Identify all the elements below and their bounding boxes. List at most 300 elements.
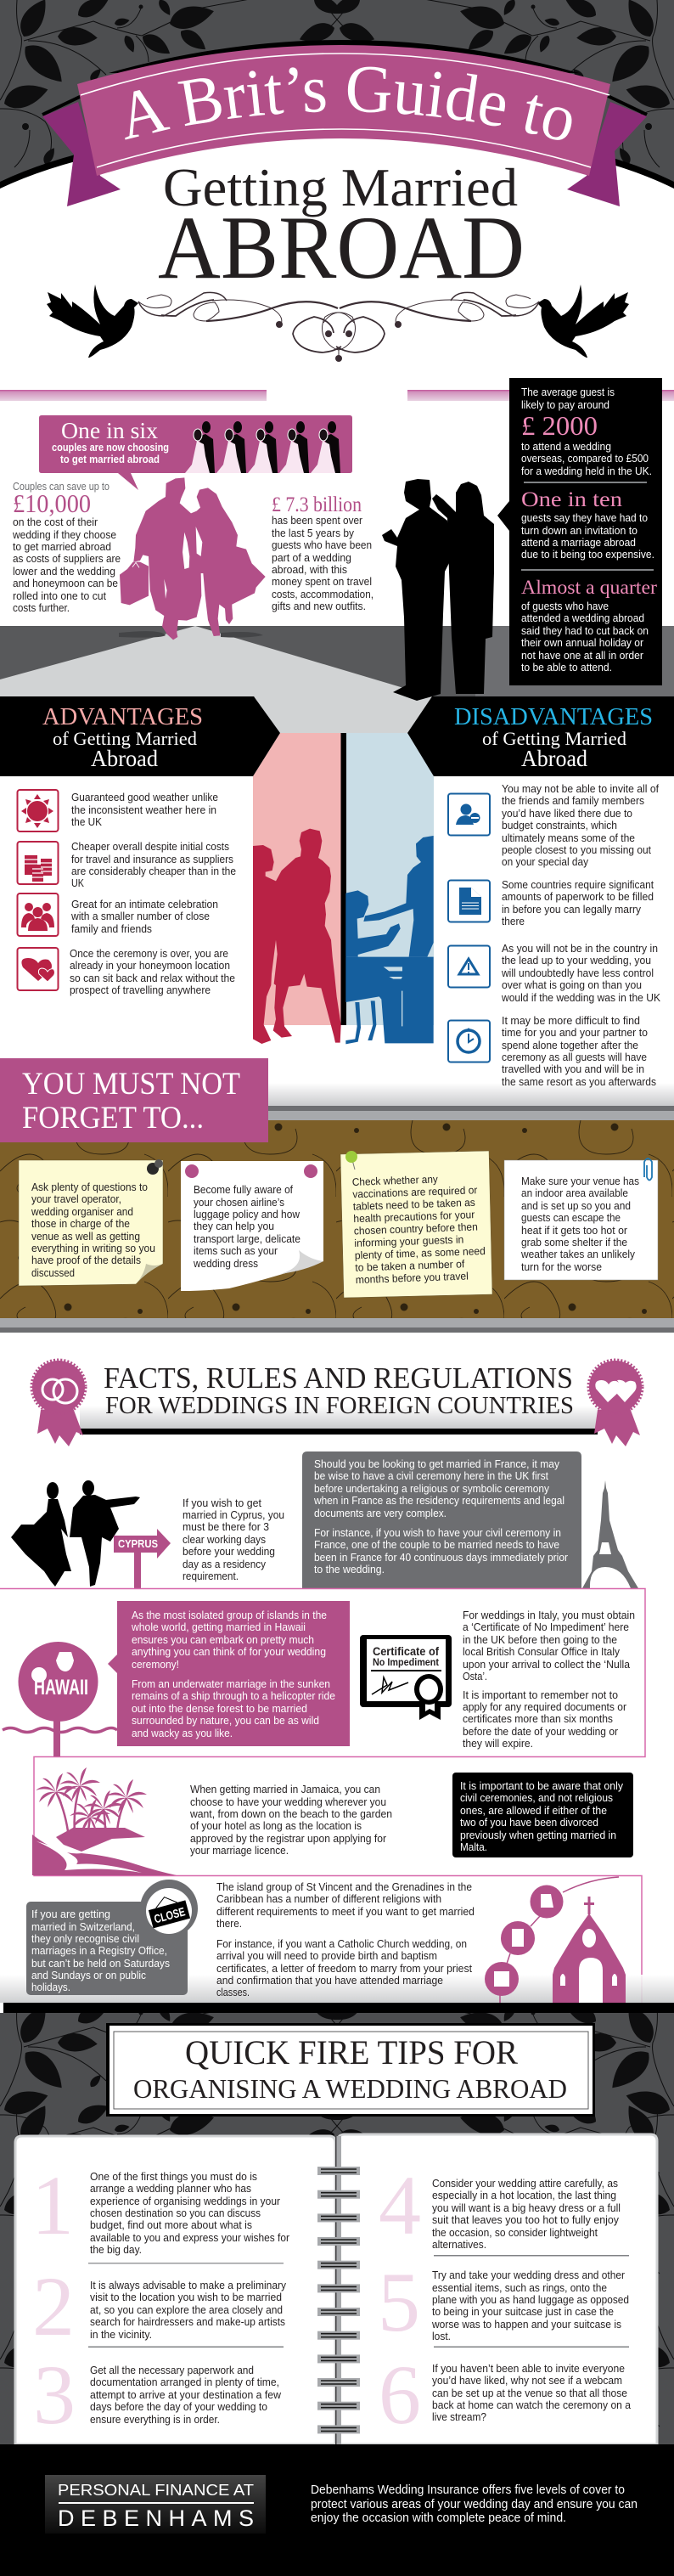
heading box: quick fire tips: QUICK FIRE TIPS FOR	[185, 2033, 518, 2072]
connector lines	[0, 1588, 645, 2003]
text: almost a quarter	[521, 577, 657, 674]
black arc under header	[0, 121, 674, 204]
white dome below header	[0, 127, 674, 399]
panel: Switzerland: marriages in a Registry Office,	[31, 1945, 167, 1957]
panel: Switzerland: If you are getting	[31, 1908, 110, 1920]
text: St Vincent: The island group of St Vincent and the Grenadines in the	[216, 1881, 472, 1893]
arrow sign: Cyprus	[114, 1529, 171, 1588]
sticky note 2: transport large, delicate	[194, 1233, 300, 1245]
icon: green pin	[345, 1151, 357, 1170]
tip 2: visit to the location you wish to be married	[90, 2291, 282, 2303]
one in six caption: to get married abroad	[60, 454, 160, 465]
tip 1: budget, find out more about what is	[90, 2219, 252, 2231]
icon: dove left	[47, 285, 138, 358]
text: Italy	[463, 1609, 635, 1750]
tip 2: at, so you can explore the area closely and	[90, 2304, 283, 2316]
text: Cyprus: requirement.	[183, 1570, 239, 1582]
heading panel: advantages: Abroad	[91, 746, 158, 771]
text: Debenhams insurance: protect various areas of your wedding day and ensure you can	[311, 2497, 637, 2511]
text: Cyprus: day as a residency	[183, 1559, 267, 1570]
text: St Vincent: there.	[216, 1918, 242, 1930]
text: average guest: The average guest is	[521, 386, 615, 398]
text: Italy: they will expire.	[463, 1738, 533, 1750]
sticky note 2: Become fully aware of	[194, 1184, 293, 1196]
text: average guest: to attend a wedding	[521, 441, 611, 453]
text: advantages list: are considerably cheaper than in the	[71, 865, 236, 877]
text: average guest	[521, 386, 652, 477]
panel: Switzerland: and Sundays or on public	[31, 1970, 146, 1981]
panel: Switzerland: they only recognise civil	[31, 1933, 139, 1945]
text: almost a quarter: of guests who have	[521, 600, 609, 612]
sticky note 1: wedding organiser and	[31, 1206, 133, 1218]
text: Debenhams insurance: Debenhams Wedding Insurance offers five levels of cover to	[311, 2483, 625, 2497]
text: advantages list: Cheaper overall despite initial costs	[71, 841, 229, 853]
text: disadvantages list: You may not be able to invite all of	[502, 783, 660, 795]
heading panel: disadvantages	[407, 696, 674, 776]
tip 5: lost.	[432, 2331, 451, 2342]
tip 4	[432, 2178, 621, 2251]
sticky note 4: and is set up so you and	[521, 1200, 631, 1212]
sticky note 3	[340, 1151, 492, 1298]
flourish ornament	[138, 292, 539, 362]
sticky note 1: your travel operator,	[31, 1193, 121, 1205]
text: disadvantages list: would if the wedding was in the UK	[501, 992, 661, 1004]
heading panel: disadvantages: of Getting Married	[482, 728, 626, 749]
text: almost a quarter: Almost a quarter	[521, 577, 657, 598]
text: Italy: in the UK before then going to the	[463, 1634, 617, 1646]
sticky note 1: venue as well as getting	[31, 1231, 140, 1243]
tip 5: to being in your suitcase just in case the	[432, 2306, 614, 2318]
text: one in ten	[521, 488, 654, 561]
panel: Switzerland: holidays.	[31, 1981, 70, 1993]
text: Cyprus: must be there for 3	[183, 1521, 269, 1533]
heading: facts rules and regulations: FACTS, RULES AND REGULATIONS	[104, 1361, 573, 1395]
text: disadvantages list	[501, 783, 661, 1088]
panel: France: to the wedding.	[314, 1564, 385, 1575]
icon: dove right	[537, 285, 629, 358]
text: 7.3 billion: £ 7.3 billion	[272, 493, 362, 516]
sticky note 3: vaccinations are required or	[352, 1184, 478, 1200]
text: St Vincent: certificates, a letter of freedom to marry from your priest	[216, 1963, 473, 1975]
heading box: quick fire tips: ORGANISING A WEDDING ABROAD	[133, 2073, 567, 2104]
text: Debenhams insurance: enjoy the occasion with complete peace of mind.	[311, 2511, 566, 2525]
tip 1: One of the first things you must do is	[90, 2171, 257, 2183]
heading panel: you must not forget to	[0, 1058, 268, 1142]
text: 7.3 billion: costs, accommodation,	[272, 589, 374, 600]
tip 6: you’d have liked, why not see if a webcam	[432, 2375, 622, 2387]
text: St Vincent: different requirements to meet if you want to get married	[216, 1906, 475, 1918]
panel: Malta: ones, are allowed if either of the	[460, 1805, 607, 1817]
icon: close sign: CLOSE	[153, 1904, 187, 1925]
text: advantages list: so can sit back and relax without the	[70, 972, 235, 984]
text: disadvantages list: the friends and family members	[502, 795, 644, 807]
text: couples can save: to get married abroad	[13, 541, 111, 553]
panel: noticeboard	[0, 1106, 674, 1333]
sticky note 2: items such as your	[194, 1245, 278, 1257]
text: Italy: local British Consular Office in Italy	[463, 1646, 621, 1658]
text: Italy: For weddings in Italy, you must obtain	[463, 1609, 635, 1621]
notebook spine and spiral rings	[317, 2136, 360, 2444]
text: Italy: Osta’.	[463, 1671, 487, 1683]
tip 4: the occasion, so consider lightweight	[432, 2227, 598, 2239]
sticky note 2: luggage policy and how	[194, 1209, 300, 1220]
panel: Hawaii: ceremony!	[132, 1659, 179, 1671]
text: disadvantages list: you’d have liked there due to	[502, 808, 632, 820]
tip 2: in the vicinity.	[90, 2329, 152, 2341]
text: Cyprus: If you wish to get	[183, 1497, 262, 1509]
panel: Hawaii: From an underwater marriage in the sunken	[132, 1678, 330, 1690]
text: advantages list	[70, 792, 236, 996]
sticky note 4: heat if it gets too hot or	[521, 1225, 627, 1237]
tip 4: suit that leaves you too hot to fully enjoy	[432, 2214, 620, 2226]
panel: Malta: civil ceremonies, and not religious	[460, 1792, 613, 1804]
silhouette: red couple	[253, 829, 341, 1044]
panel: Hawaii: anything you can think of for your wedding	[132, 1646, 326, 1658]
text: almost a quarter: to be able to attend.	[521, 662, 612, 674]
heading panel: you must not forget to: FORGET TO...	[22, 1101, 204, 1136]
tip 3: documentation arranged in plenty of time,	[90, 2376, 279, 2388]
sticky note 3: informing your guests in	[354, 1233, 464, 1249]
tip 3: ensure everything is in order.	[90, 2414, 220, 2426]
panel: quick fire section background	[0, 1998, 674, 2446]
ribbon banner	[42, 40, 648, 206]
sticky note 4: an indoor area available	[521, 1187, 628, 1199]
text: advantages list: Great for an intimate celebration	[71, 899, 218, 910]
heading panel: disadvantages: DISADVANTAGES	[454, 703, 653, 730]
tip 4: alternatives.	[432, 2239, 486, 2251]
text: Cyprus: before your wedding	[183, 1546, 275, 1558]
text: disadvantages list: It may be more difficult to find	[502, 1015, 640, 1027]
text: Italy: before the date of your wedding or	[463, 1726, 618, 1738]
icon: coins	[17, 842, 58, 884]
sticky note 3: to be taken a number of	[355, 1258, 465, 1274]
text: disadvantages list: will undoubtedly have less control	[501, 967, 654, 979]
big number 3: 3	[33, 2348, 76, 2442]
text: advantages list: with a smaller number of close	[70, 910, 210, 922]
panel: Hawaii: ensures you can embark on pretty much	[132, 1634, 314, 1646]
tip 5: Try and take your wedding dress and other	[432, 2269, 625, 2281]
heading: facts rules and regulations: FOR WEDDINGS IN FOREIGN COUNTRIES	[105, 1392, 574, 1419]
sticky note 3: months before you travel	[356, 1270, 469, 1286]
icon: Hawaii balloon sign: HAWAII	[34, 1676, 88, 1699]
text: almost a quarter: said they had to cut back on	[521, 625, 649, 637]
panel: Hawaii: and wacky as you like.	[132, 1728, 233, 1739]
text: St Vincent: and confirmation that you have attended marriage	[216, 1975, 443, 1987]
text: Jamaica: your marriage licence.	[190, 1845, 289, 1857]
tip 6	[432, 2363, 631, 2423]
heading panel: advantages: of Getting Married	[53, 728, 197, 749]
icon: palm tree island	[32, 1767, 177, 1875]
floor with aisle	[0, 626, 674, 733]
sticky note 3: Check whether any	[352, 1173, 439, 1188]
icon: rosette with rings	[32, 1361, 85, 1446]
icon: certificate of no impediment: Certificate of	[373, 1644, 439, 1658]
heading box: quick fire tips	[106, 2023, 595, 2117]
tip 4: Consider your wedding attire carefully, as	[432, 2178, 618, 2190]
sticky note 2: wedding dress	[193, 1258, 258, 1270]
icon: sun	[17, 790, 58, 831]
text: 7.3 billion: part of a wedding	[272, 552, 351, 564]
panel: France: when in France as the residency requirements and legal	[313, 1495, 564, 1507]
tip 2: search for hairdressers and make-up artists	[90, 2316, 285, 2328]
title: A Brit's Guide to: A Brit’s Guide to	[125, 66, 572, 140]
silhouette: black couple	[382, 479, 494, 701]
sticky note 1	[19, 1159, 163, 1286]
text: St Vincent: classes.	[216, 1987, 250, 1998]
text: Jamaica	[189, 1784, 392, 1857]
tip 5	[431, 2269, 629, 2342]
heading panel: advantages	[0, 696, 280, 776]
heading panel: advantages: ADVANTAGES	[42, 703, 203, 730]
text: Jamaica: approved by the registrar upon applying for	[190, 1833, 386, 1845]
text: one in ten: turn down an invitation to	[521, 525, 637, 537]
arrow sign: Cyprus: CYPRUS	[118, 1537, 158, 1550]
panel: Hawaii: remains of a ship through to a helicopter ride	[132, 1690, 335, 1702]
tip 5: essential items, such as rings, onto the	[432, 2282, 607, 2294]
tip 3: Get all the necessary paperwork and	[90, 2365, 254, 2376]
gradient above noticeboard	[268, 1083, 674, 1106]
title: Getting Married Abroad: Getting Married	[163, 158, 518, 217]
text: disadvantages list: people closest to you missing out	[502, 844, 651, 856]
panel: France: Should you be looking to get married in France, it may	[314, 1458, 560, 1470]
text: advantages list: Once the ceremony is over, you are	[70, 948, 228, 960]
text: disadvantages list: on your special day	[502, 856, 589, 868]
one in six caption	[52, 442, 169, 465]
text: St Vincent	[216, 1881, 475, 1998]
tip 6: live stream?	[432, 2411, 486, 2423]
text: disadvantages list: the same resort as you afterwards	[502, 1076, 656, 1088]
sticky note 1: everything in writing so you	[31, 1243, 155, 1254]
text: couples can save	[12, 481, 121, 614]
facts heading band	[80, 1406, 598, 1435]
sticky note 1: those in charge of the	[31, 1218, 130, 1230]
panel: Malta: previously when getting married in	[460, 1829, 616, 1841]
one in six caption: couples are now choosing	[52, 442, 169, 454]
panel: France: before undertaking a religious or symbolic ceremony	[314, 1483, 550, 1495]
heading panel: you must not forget to: YOU MUST NOT	[22, 1067, 240, 1102]
text: couples can save: rolled into one to cut	[13, 590, 107, 602]
text: almost a quarter: not have one at all in order	[521, 650, 643, 662]
logo: Personal Finance at Debenhams: PERSONAL FINANCE AT	[58, 2482, 254, 2499]
text: Cyprus: married in Cyprus, you	[183, 1509, 284, 1521]
sticky note 3: tablets need to be taken as	[353, 1197, 475, 1213]
heading panel: disadvantages: Abroad	[521, 746, 587, 771]
silhouette: pink couple with shopping bags	[120, 477, 266, 640]
pink bar left	[0, 390, 267, 401]
icon: church with document bubbles	[485, 1877, 626, 2003]
text: disadvantages list: spend alone together after the	[502, 1040, 638, 1051]
text: advantages list: the UK	[71, 816, 103, 828]
text: Italy: upon your arrival to collect the ‘Nulla	[463, 1659, 630, 1671]
sticky note 4: grab some shelter if the	[521, 1237, 627, 1249]
text: disadvantages list: ceremony as all guests will have	[502, 1051, 647, 1063]
icon: clock	[448, 1021, 490, 1062]
text: Jamaica: of your hotel as long as the location is	[190, 1820, 362, 1832]
tip 2: It is always advisable to make a preliminary	[90, 2280, 287, 2291]
icon: close sign	[146, 1892, 190, 1928]
panel: black guest statistics box	[497, 378, 662, 685]
tip 1: arrange a wedding planner who has	[90, 2183, 251, 2195]
tip 6: back at home can watch the ceremony on a	[432, 2399, 631, 2411]
text: Italy: certificates more than six months	[463, 1713, 613, 1725]
big number 5: 5	[378, 2255, 420, 2349]
text: Debenhams insurance	[311, 2483, 637, 2525]
panel: header background with leaf pattern	[0, 0, 674, 204]
icon: document	[448, 880, 490, 922]
big number 4: 4	[379, 2158, 421, 2252]
text: disadvantages list: in before you can legally marry	[502, 904, 642, 916]
text: 7.3 billion: guests who have been	[272, 539, 372, 551]
panel: France: documents are very complex.	[314, 1508, 447, 1519]
tip 3: days before the day of your wedding to	[90, 2401, 267, 2413]
silhouette: blue figures at table	[345, 836, 434, 1044]
icon: Hawaii balloon sign	[3, 1642, 117, 1756]
text: disadvantages list: amounts of paperwork to be filled	[502, 891, 654, 903]
text: Italy: apply for any required documents or	[463, 1701, 626, 1713]
text: disadvantages list: the lead up to your wedding, you	[502, 955, 651, 967]
text: Jamaica: When getting married in Jamaica, you can	[190, 1784, 380, 1795]
text: disadvantages list: time for you and your partner to	[502, 1027, 648, 1039]
text: advantages list: family and friends	[71, 923, 152, 935]
text: 7.3 billion: has been spent over	[272, 515, 362, 527]
sticky note 2	[181, 1161, 323, 1291]
panel: Switzerland: but can’t be held on Saturdays	[31, 1958, 170, 1970]
center columns behind figures	[253, 733, 434, 1025]
text: 7.3 billion	[272, 493, 374, 612]
panel: notebook left page	[15, 2136, 335, 2444]
text: average guest: overseas, compared to £500	[521, 453, 649, 465]
text: couples can save: as costs of suppliers are	[13, 553, 121, 565]
big number 2: 2	[32, 2259, 75, 2353]
text: average guest: £ 2000	[521, 410, 598, 441]
sticky note 4	[504, 1158, 658, 1280]
panel: Hawaii: surrounded by nature, you can be as wild	[132, 1715, 319, 1727]
tip 1	[90, 2171, 289, 2256]
tip 2	[90, 2280, 287, 2341]
icon: hearts	[17, 948, 58, 990]
panel: Hawaii: out into the dense forest to be married	[132, 1703, 307, 1715]
text: one in ten: due to it being too expensive.	[521, 549, 654, 561]
tip 6: If you haven’t been able to invite everyone	[432, 2363, 625, 2375]
silhouette: wedding couple walking	[11, 1480, 140, 1587]
logo: Personal Finance at Debenhams: DEBENHAMS	[58, 2506, 254, 2531]
sticky note 1: Ask plenty of questions to	[31, 1181, 148, 1193]
panel: France: For instance, if you wish to have your civil ceremony in	[314, 1527, 561, 1539]
sticky note 3: plenty of time, as some need	[355, 1245, 486, 1261]
panel: Hawaii	[108, 1601, 350, 1746]
text: Cyprus	[183, 1497, 284, 1582]
icon: certificate of no impediment: No Impediment	[373, 1656, 439, 1668]
text: 7.3 billion: the last 5 years by	[272, 527, 355, 539]
panel: France: France, one of the couple to be married needs to have	[314, 1539, 559, 1551]
tip 6: can be set up at the venue so that all those	[432, 2387, 627, 2399]
tip 1: available to you and express your wishes for	[90, 2232, 289, 2244]
text: almost a quarter: attended a wedding abroad	[521, 612, 644, 624]
text: one in ten: attend a marriage abroad	[521, 537, 636, 549]
text: disadvantages list: ultimately means some of the	[502, 832, 635, 844]
big number 6: 6	[379, 2348, 421, 2442]
text: couples can save: costs further.	[13, 602, 70, 614]
sticky note 4: Make sure your venue has	[521, 1175, 639, 1187]
title: Getting Married Abroad	[158, 158, 525, 297]
text: Jamaica: choose to have your wedding wherever you	[190, 1796, 386, 1808]
five bride and groom icons	[185, 421, 340, 473]
text: disadvantages list: budget constraints, which	[502, 820, 617, 831]
tip 1: chosen destination so you can discuss	[90, 2207, 261, 2219]
text: St Vincent: arrival you will need to provide birth and baptism	[216, 1950, 437, 1962]
text: disadvantages list: there	[502, 916, 525, 927]
icon: Eiffel tower	[582, 1480, 638, 1588]
text: advantages list: UK	[71, 877, 85, 889]
text: almost a quarter: their own annual holiday or	[521, 637, 643, 649]
text: Italy: It is important to remember not to	[463, 1689, 618, 1701]
panel: Malta: two of you have been divorced	[460, 1817, 598, 1829]
heading: facts rules and regulations	[104, 1361, 574, 1419]
text: disadvantages list: over what is going on than you	[502, 979, 642, 991]
panel: France	[302, 1451, 581, 1588]
text: one in ten: One in ten	[521, 488, 623, 511]
text: 7.3 billion: abroad, with this	[272, 564, 347, 576]
tip 1: experience of organising weddings in your	[90, 2196, 280, 2207]
gradient above quick fire band	[0, 1975, 674, 2003]
tip 3: attempt to arrive at your destination a few	[90, 2389, 282, 2401]
sticky note 4: turn for the worse	[521, 1261, 602, 1273]
text: Cyprus: clear working days	[183, 1534, 266, 1546]
text: advantages list: Guaranteed good weather unlike	[71, 792, 218, 803]
text: 7.3 billion: money spent on travel	[272, 576, 372, 588]
panel: Malta: It is important to be aware that only	[460, 1780, 624, 1792]
tip 3	[90, 2365, 282, 2426]
text: average guest: for a wedding held in the UK.	[521, 465, 652, 477]
tip 4: especially in a hot location, the last thing	[432, 2190, 616, 2201]
panel: France: been in France for 40 continuous days immediately prior	[314, 1552, 568, 1564]
text: advantages list: prospect of travelling anywhere	[70, 984, 211, 996]
sticky note 4: guests can escape the	[521, 1212, 621, 1224]
text: couples can save: £10,000	[13, 488, 91, 518]
tip 5: worse was to happen and your suitcase is	[431, 2319, 621, 2331]
sticky note 1: have proof of the details	[31, 1254, 141, 1266]
sticky note 2: they can help you	[194, 1220, 274, 1232]
pink bar right	[407, 390, 674, 401]
panel: Hawaii: whole world, getting married in Hawaii	[131, 1621, 306, 1633]
text: couples can save: wedding if they choose	[12, 529, 116, 541]
panel: one in six callout	[39, 415, 352, 490]
one in six heading: One in six	[61, 418, 159, 443]
title: Getting Married Abroad: ABROAD	[158, 198, 525, 297]
text: disadvantages list: Some countries require significant	[502, 879, 654, 891]
sticky note 3: health precautions for your	[353, 1209, 475, 1225]
text: advantages list: already in your honeymoon location	[70, 960, 230, 972]
tip 4: you will want is a big heavy dress or a full	[432, 2202, 621, 2214]
sticky note 1: discussed	[31, 1267, 75, 1279]
panel: Malta: Malta.	[460, 1841, 487, 1853]
panel: Switzerland	[26, 1880, 198, 1995]
icon: pink pins	[185, 1164, 317, 1178]
sticky note 4: weather takes an unlikely	[520, 1249, 636, 1260]
text: couples can save: on the cost of their	[13, 516, 98, 528]
icon: warning triangle	[448, 946, 490, 987]
text: one in ten: guests say they have had to	[521, 512, 648, 524]
icon: certificate of no impediment	[360, 1635, 452, 1720]
icon: person minus	[448, 793, 490, 836]
text: Jamaica: want, from down on the beach to the garden	[189, 1808, 392, 1820]
icon: paper clip	[644, 1158, 652, 1181]
big number 1: 1	[31, 2158, 74, 2252]
panel: Malta	[452, 1773, 633, 1857]
text: average guest: likely to pay around	[521, 399, 609, 411]
icon: rosette with hearts	[589, 1361, 642, 1446]
sticky note 2: your chosen airline’s	[194, 1197, 284, 1209]
